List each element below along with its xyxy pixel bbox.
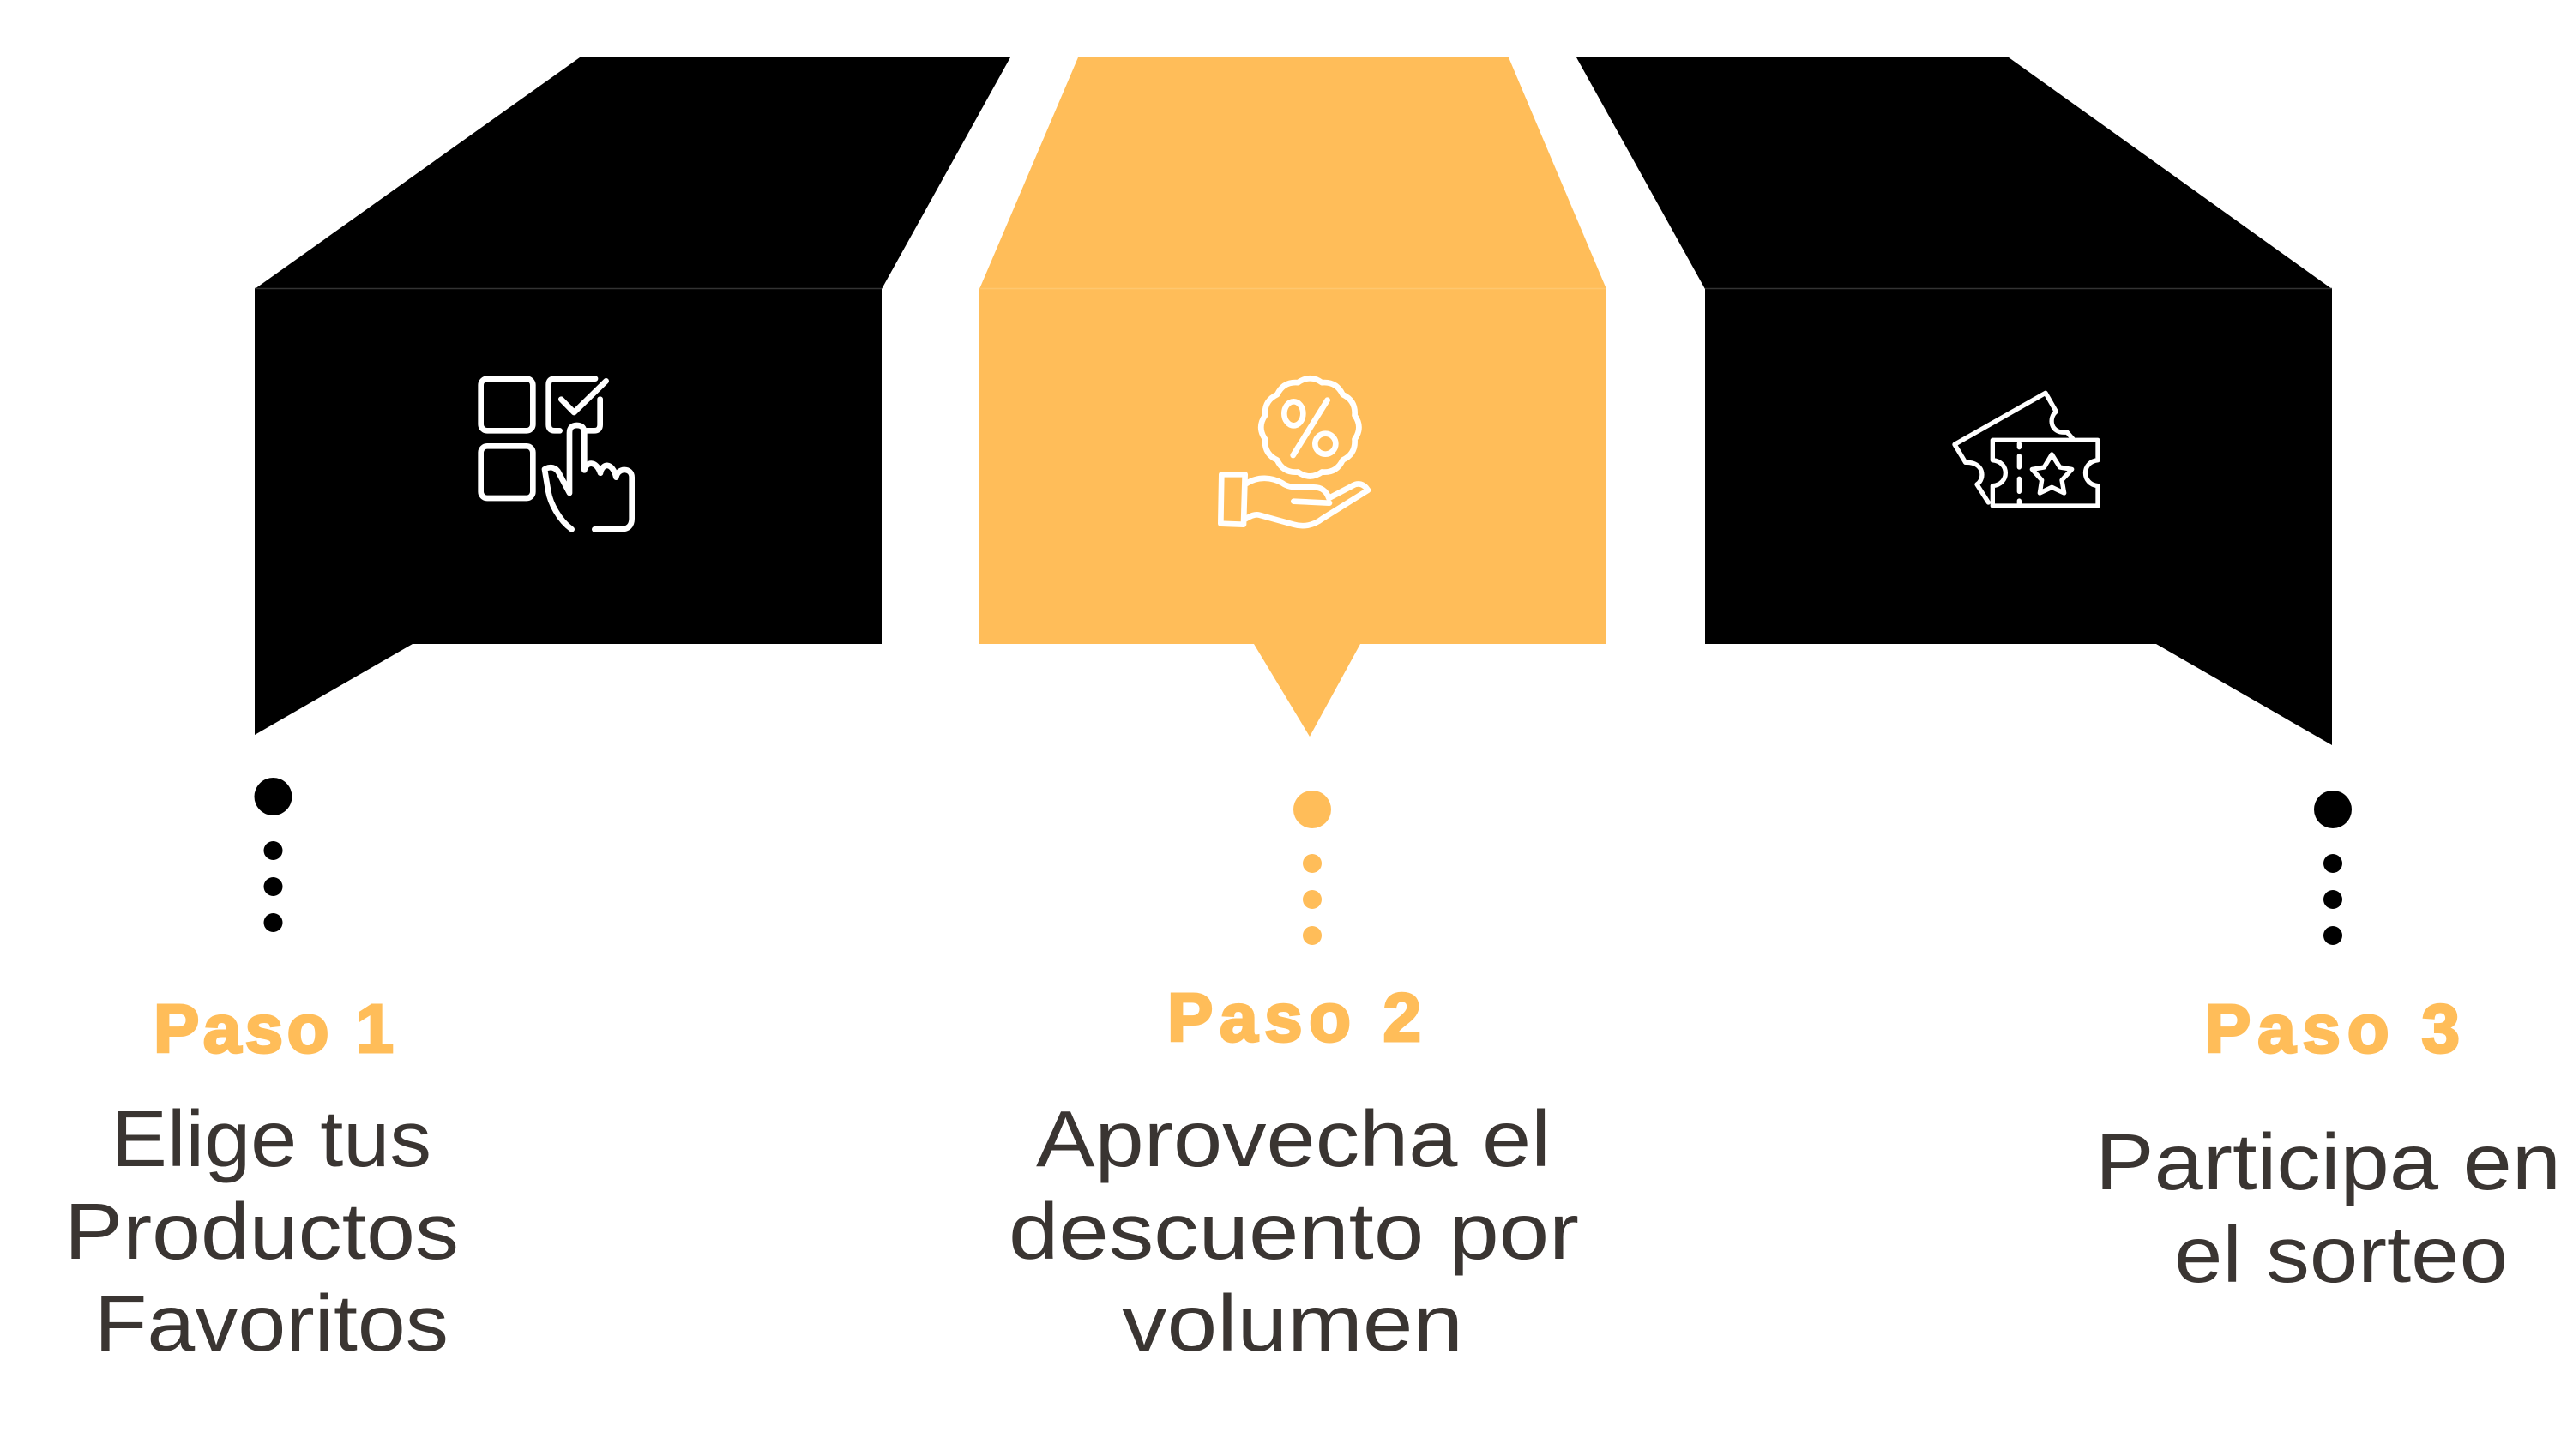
icon: hand holding discount badge	[1220, 378, 1368, 526]
text: step 3 description: Participa en	[2095, 1117, 2561, 1206]
heading: Paso 2: Paso 2	[1167, 979, 1421, 1056]
dots: step 3	[2314, 791, 2352, 945]
panel: step 1 black banner	[255, 57, 1010, 735]
icon: selecting a checklist option by hand	[481, 379, 632, 529]
text: step 2 description: Aprovecha el	[1036, 1094, 1551, 1183]
text: step 1 description: Elige tus	[111, 1094, 431, 1183]
panel: step 3 black banner	[1576, 57, 2332, 745]
text: step 1 description: Favoritos	[94, 1279, 449, 1368]
text: step 3 description	[2095, 1117, 2561, 1299]
text: step 2 description	[1009, 1094, 1579, 1368]
panel: step 2 orange banner	[979, 57, 1606, 737]
text: step 1 description	[64, 1094, 459, 1368]
heading: Paso 1: Paso 1	[154, 990, 394, 1067]
text: step 2 description: volumen	[1122, 1279, 1463, 1368]
icon: raffle tickets with star	[1955, 393, 2098, 506]
heading: Paso 3: Paso 3	[2205, 990, 2460, 1067]
text: step 3 description: el sorteo	[2174, 1210, 2508, 1299]
text: step 1 description: Productos	[64, 1187, 459, 1276]
dots: step 1	[254, 778, 292, 932]
dots: step 2	[1293, 791, 1331, 945]
text: step 2 description: descuento por	[1009, 1187, 1579, 1276]
